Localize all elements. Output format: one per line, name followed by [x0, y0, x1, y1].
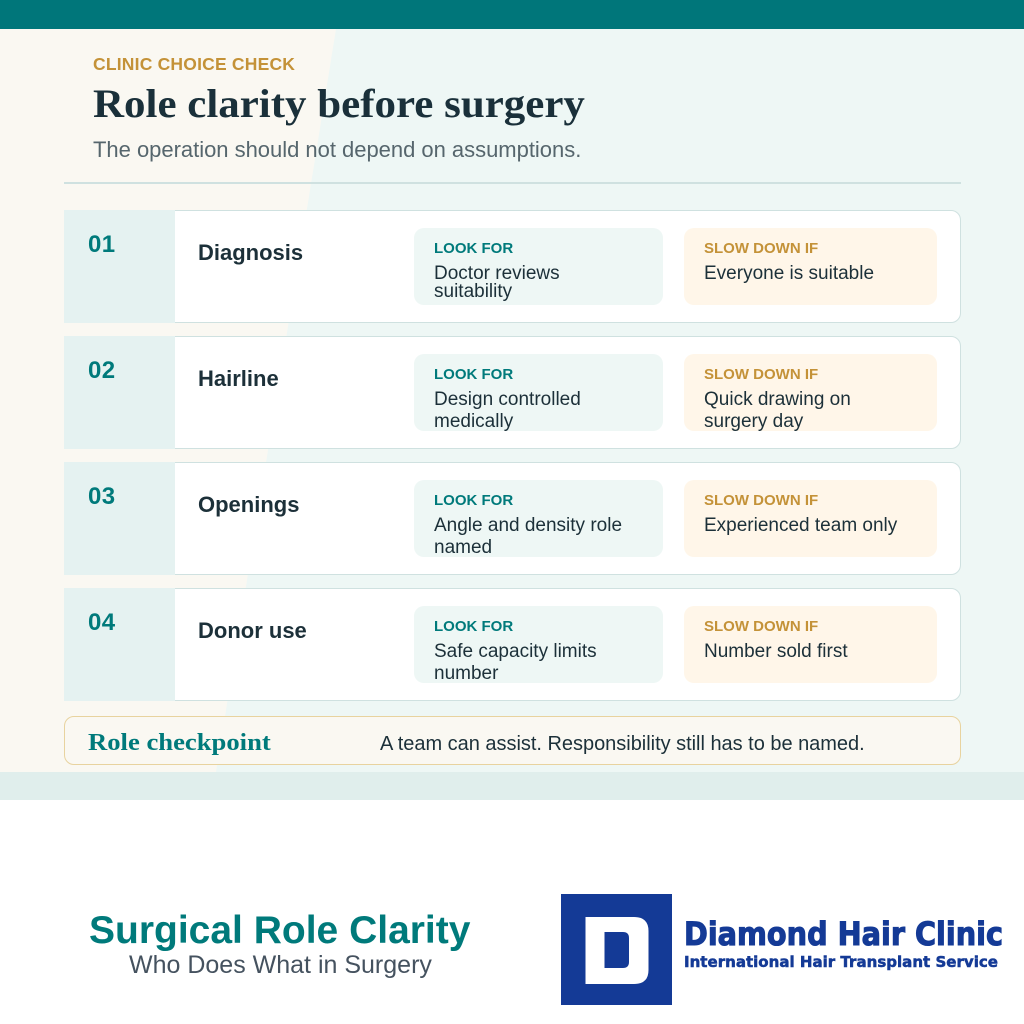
top band	[0, 0, 1024, 29]
number 04: 04	[88, 609, 116, 636]
look for 03: Angle and density role	[434, 515, 622, 536]
slow down 03: SLOW DOWN IF	[704, 492, 818, 509]
background panel	[0, 29, 1024, 772]
logo tagline: International Hair Transplant Service	[684, 953, 998, 971]
look for 04: Safe capacity limits	[434, 641, 597, 662]
eyebrow: CLINIC CHOICE CHECK	[93, 54, 295, 74]
slow down 04	[684, 606, 937, 683]
name 04: Donor use	[198, 618, 307, 643]
number 02: 02	[88, 357, 116, 384]
slow down 03	[684, 480, 937, 557]
card 02	[64, 336, 961, 449]
slow down 02	[684, 354, 937, 431]
slow down 02: Quick drawing on	[704, 389, 851, 410]
name 03: Openings	[198, 492, 299, 517]
number cell 03	[64, 462, 175, 575]
look for 03	[414, 480, 663, 557]
number cell 01	[64, 210, 175, 323]
bottom band	[0, 772, 1024, 800]
card 01	[64, 210, 961, 323]
slow down 01: Everyone is suitable	[704, 263, 874, 284]
number 01: 01	[88, 231, 116, 258]
footer title: Surgical Role Clarity	[89, 909, 470, 952]
checkpoint heading: Role checkpoint	[88, 730, 271, 756]
look for 01: Doctor reviews	[434, 263, 560, 284]
row 03: Openings	[64, 462, 961, 575]
look for 02: Design controlled	[434, 389, 581, 410]
slow down 03: Experienced team only	[704, 515, 897, 536]
name 02: Hairline	[198, 366, 279, 391]
footer subtitle: Who Does What in Surgery	[129, 951, 432, 979]
slow down 01: SLOW DOWN IF	[704, 240, 818, 257]
row 04: Donor use	[64, 588, 961, 701]
subtitle: The operation should not depend on assumptions.	[93, 137, 581, 162]
logo: Diamond Hair Clinic	[561, 894, 1003, 1005]
number cell 04	[64, 588, 175, 701]
slow down 01	[684, 228, 937, 305]
look for 03: LOOK FOR	[434, 492, 513, 509]
card 03	[64, 462, 961, 575]
role checkpoint callout	[64, 716, 961, 765]
look for 01: suitability	[434, 281, 512, 302]
look for 02	[414, 354, 663, 431]
slow down 04: Number sold first	[704, 641, 848, 662]
row 02: Hairline	[64, 336, 961, 449]
header rule	[64, 182, 961, 184]
look for 04: LOOK FOR	[434, 618, 513, 635]
checkpoint text: A team can assist. Responsibility still has to be named.	[380, 733, 865, 755]
row 01: Diagnosis	[64, 210, 961, 323]
look for 04	[414, 606, 663, 683]
number cell 02	[64, 336, 175, 449]
name 01: Diagnosis	[198, 240, 303, 265]
title: Role clarity before surgery	[93, 81, 585, 126]
slow down 04: SLOW DOWN IF	[704, 618, 818, 635]
card 04	[64, 588, 961, 701]
slow down 02: SLOW DOWN IF	[704, 366, 818, 383]
number 03: 03	[88, 483, 116, 510]
look for 02: LOOK FOR	[434, 366, 513, 383]
look for 01	[414, 228, 663, 305]
icon: D square	[561, 894, 672, 1005]
look for 01: LOOK FOR	[434, 240, 513, 257]
